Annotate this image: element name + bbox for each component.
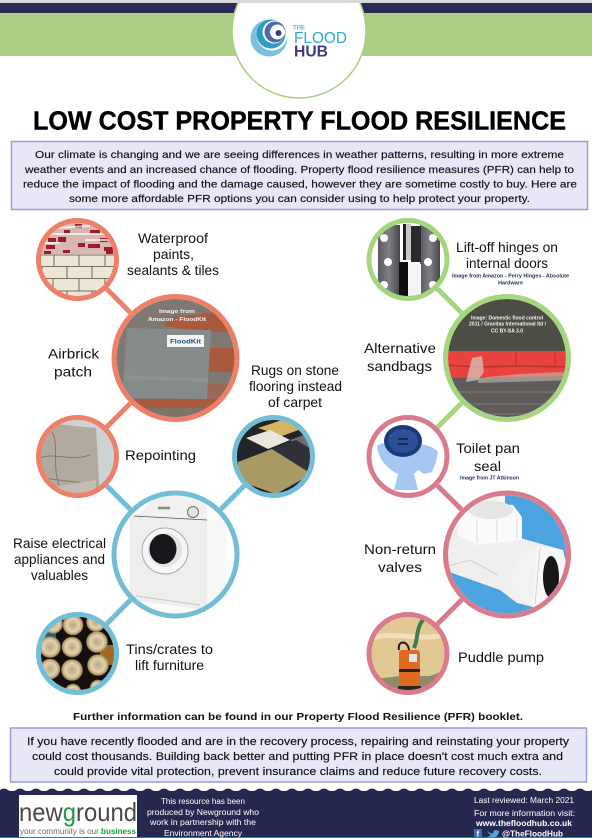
- label: appliances and: [14, 551, 105, 567]
- photo: repointing: [36, 415, 120, 499]
- label: Airbrick: [48, 346, 100, 362]
- label: [364, 340, 436, 374]
- icon: swirl: [250, 20, 288, 56]
- label: [456, 440, 520, 482]
- contact information: Last reviewed: March 2021: [474, 796, 575, 805]
- image credit: Amazon - FloodKit: [148, 317, 206, 323]
- partnership text: [147, 797, 260, 838]
- image credit: [452, 274, 569, 286]
- further information line: Further information can be found in our Property Flood Resilience (PFR) booklet.: [73, 711, 523, 723]
- label: internal doors: [466, 255, 548, 271]
- label: Lift-off hinges on: [456, 239, 558, 255]
- photo: tiles and bricks: [36, 218, 120, 302]
- label: of carpet: [268, 394, 322, 410]
- label: [126, 641, 213, 673]
- label: [452, 239, 569, 286]
- icon: twitter: [487, 830, 500, 838]
- label: Toilet pan: [456, 440, 520, 456]
- intro text box: Our climate is changing and we are seeing differences in weather patterns, resulting in more extreme: [35, 149, 564, 161]
- photo: washing machine: [112, 490, 240, 619]
- contact information: For more information visit:: [474, 809, 575, 818]
- label: [48, 346, 100, 380]
- image credit: Hardware: [498, 280, 523, 286]
- photo: puddle pump: [366, 612, 451, 696]
- image credit: Image: Domestic flood control: [471, 316, 543, 322]
- photo: toilet pan seal: [366, 415, 451, 499]
- intro text box: some more affordable PFR options you can consider using to help protect your property.: [69, 193, 530, 205]
- logo text: HUB: [294, 44, 328, 60]
- label: valuables: [31, 567, 88, 583]
- contact information: [474, 796, 575, 838]
- label: Puddle pump: [458, 649, 544, 665]
- connector lines: [78, 260, 507, 654]
- image credit: [469, 316, 546, 334]
- footer band: [0, 788, 592, 838]
- image credit: [148, 309, 206, 323]
- recovery text box: could provide vital protection, prevent insurance claims and reduce future recovery costs.: [54, 766, 542, 778]
- logo text: [293, 24, 347, 60]
- label: Alternative: [364, 340, 436, 356]
- image credit: 2011 / Gravitas International ltd /: [469, 322, 546, 328]
- image credit: Image from JT Atkinson: [460, 476, 520, 482]
- partnership text: produced by Newground who: [147, 808, 260, 817]
- contact information: www.thefloodhub.co.uk: [475, 819, 573, 828]
- recovery text box: [10, 728, 586, 782]
- logo text: FLOOD: [294, 30, 347, 47]
- label: Raise electrical: [13, 535, 106, 551]
- label: sandbags: [367, 358, 432, 374]
- label: paints,: [153, 246, 194, 262]
- intro text box: reduce the impact of flooding and the damage caused, however they are sometime costly to buy. Here are: [23, 178, 577, 190]
- label: Waterproof: [138, 230, 208, 246]
- title: LOW COST PROPERTY FLOOD RESILIENCE: [33, 108, 566, 136]
- label: sealants & tiles: [127, 262, 219, 278]
- header banner: [0, 0, 592, 56]
- label: flooring instead: [249, 378, 342, 394]
- partnership text: Environment Agency: [164, 829, 242, 838]
- intro text box: [12, 142, 588, 210]
- partnership text: work in partnership with the: [149, 818, 257, 827]
- photo: rugs: [232, 415, 316, 499]
- intro text box: weather events and an increased chance of flooding. Property flood resilience measures (PFR) can help to: [24, 164, 574, 176]
- label: Non-return: [364, 541, 436, 557]
- label: [127, 230, 219, 278]
- recovery text box: could cost thousands. Building back better and putting PFR in place doesn't cost much extra and: [32, 751, 563, 763]
- recovery text box: If you have recently flooded and are in the recovery process, repairing and reinstating your property: [27, 736, 570, 748]
- label: [249, 362, 342, 410]
- partnership text: This resource has been: [161, 797, 245, 806]
- photo: hinges: [366, 218, 451, 302]
- photo: alternative sandbags: [443, 294, 575, 424]
- logo: Newground: your community is our business: [20, 826, 136, 836]
- label: Tins/crates to: [126, 641, 213, 657]
- label: lift furniture: [135, 657, 204, 673]
- image credit: Image from Amazon - Perry Hinges - Absolute: [452, 274, 569, 280]
- image credit: Image from: [159, 309, 195, 315]
- label: valves: [378, 559, 422, 575]
- label: Rugs on stone: [251, 362, 339, 378]
- label: Repointing: [125, 447, 196, 463]
- photo: non-return valve: [443, 490, 571, 619]
- logo: Newground: newground: [19, 797, 137, 827]
- label: [364, 541, 436, 575]
- logo text: THE: [293, 24, 306, 32]
- logo: The Flood Hub: [232, 0, 366, 98]
- image credit: CC BY-SA 3.0: [491, 328, 523, 334]
- photo: airbrick patch: FloodKit: [170, 338, 202, 346]
- logo: Newground: [19, 795, 137, 837]
- photo: tins: [36, 612, 120, 700]
- label: seal: [474, 458, 501, 474]
- label: patch: [54, 364, 92, 380]
- label: [13, 535, 106, 583]
- photo: airbrick patch: [112, 294, 240, 422]
